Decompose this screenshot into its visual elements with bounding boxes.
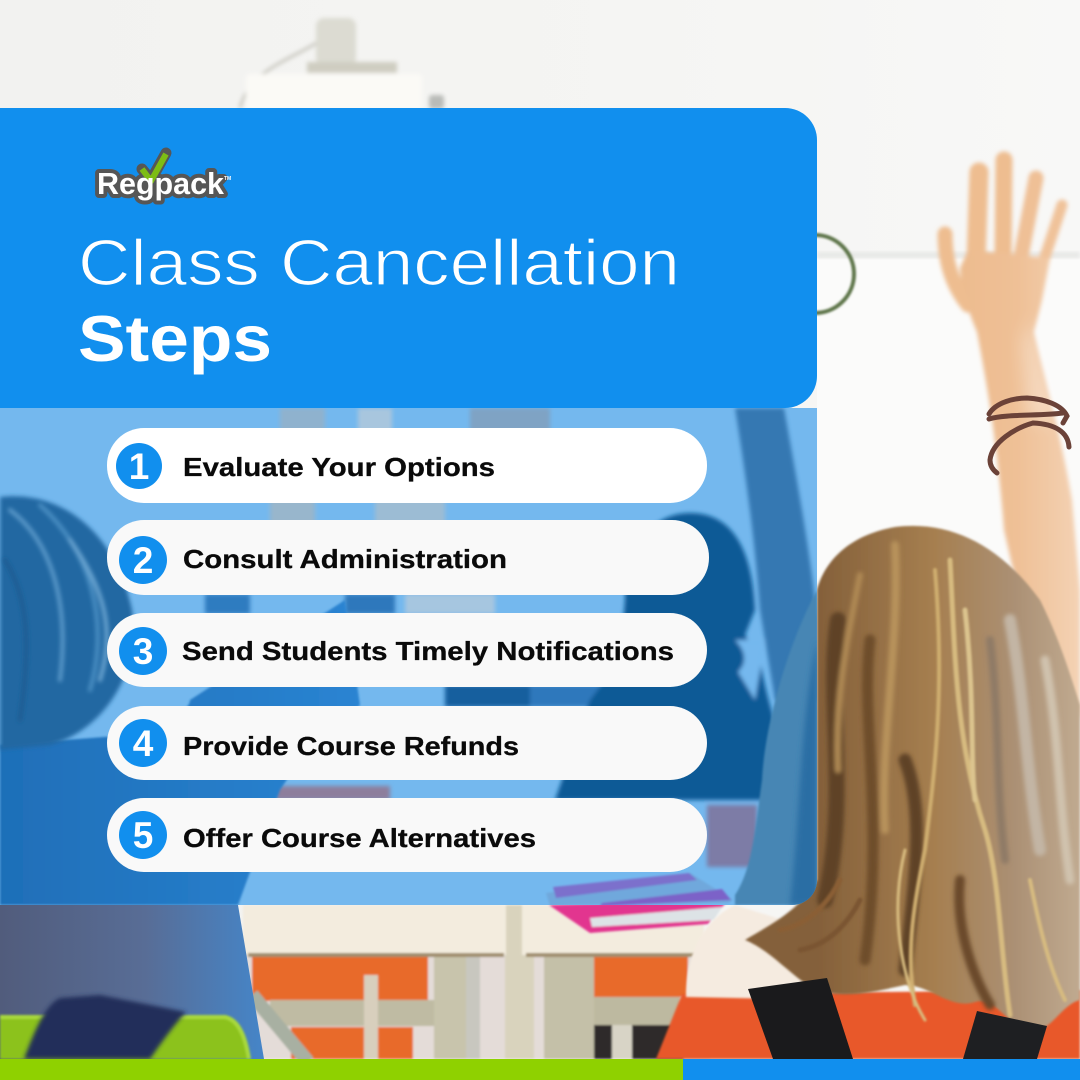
- step 1: Evaluate Your Options: [183, 452, 495, 482]
- step 5: [107, 798, 707, 872]
- title line one: Class Cancellation: [78, 226, 680, 299]
- projector: [240, 18, 444, 110]
- backpack straps: [748, 978, 853, 1059]
- hair strands: [825, 545, 1070, 1005]
- tinted book top: [546, 873, 733, 906]
- logo wordmark outline: Regpack: [97, 166, 225, 201]
- tinted raised arm: [735, 408, 817, 700]
- white shirt: [686, 905, 830, 1000]
- logo wordmark: Regpack: [97, 166, 225, 201]
- step 4: 4: [133, 723, 154, 764]
- footer bar: [0, 1059, 1080, 1080]
- tinted dark classmate: [555, 513, 800, 800]
- wall clock: [776, 235, 854, 313]
- step 2: [107, 520, 709, 595]
- dark backpack on green chair: [24, 995, 186, 1059]
- raised arm and hand: [945, 160, 1080, 720]
- steps list: [107, 428, 709, 872]
- logo check mark fill: [142, 154, 166, 181]
- title: [78, 226, 680, 375]
- translucent blue lower panel with tinted photo: [0, 408, 817, 906]
- tinted boy's shirt: [0, 600, 360, 905]
- palm and forearm: [960, 250, 1080, 720]
- logo trademark: TM: [224, 176, 231, 182]
- girl's hair: [745, 526, 1080, 1031]
- tinted desk: [707, 805, 757, 867]
- step 3: [107, 613, 707, 687]
- bracelets: [989, 398, 1069, 473]
- step 1: 1: [129, 446, 149, 487]
- fingers: [945, 160, 1062, 305]
- desks and chairs behind: [240, 905, 710, 1062]
- step 4: Provide Course Refunds: [183, 731, 519, 761]
- step 2: 2: [133, 540, 153, 581]
- tinted background figures: [278, 408, 326, 428]
- step 5: Offer Course Alternatives: [183, 823, 536, 853]
- solid blue header panel: [0, 108, 817, 408]
- step 2: Consult Administration: [183, 544, 507, 574]
- pink book: [549, 900, 728, 933]
- step 4: [107, 706, 707, 780]
- title line two: Steps: [78, 302, 272, 375]
- logo check mark: [142, 153, 166, 180]
- step 5: 5: [133, 815, 153, 856]
- step 1: [107, 428, 707, 503]
- orange chair: [656, 990, 1080, 1059]
- step 3: 3: [133, 631, 153, 672]
- green chair: [0, 1015, 250, 1059]
- boy's shirt below panel: [0, 905, 264, 1059]
- Regpack logo: [97, 153, 231, 201]
- step 3: Send Students Timely Notifications: [182, 636, 674, 666]
- tinted boy's hair: [0, 496, 134, 750]
- tinted girl's hair edge: [735, 590, 817, 905]
